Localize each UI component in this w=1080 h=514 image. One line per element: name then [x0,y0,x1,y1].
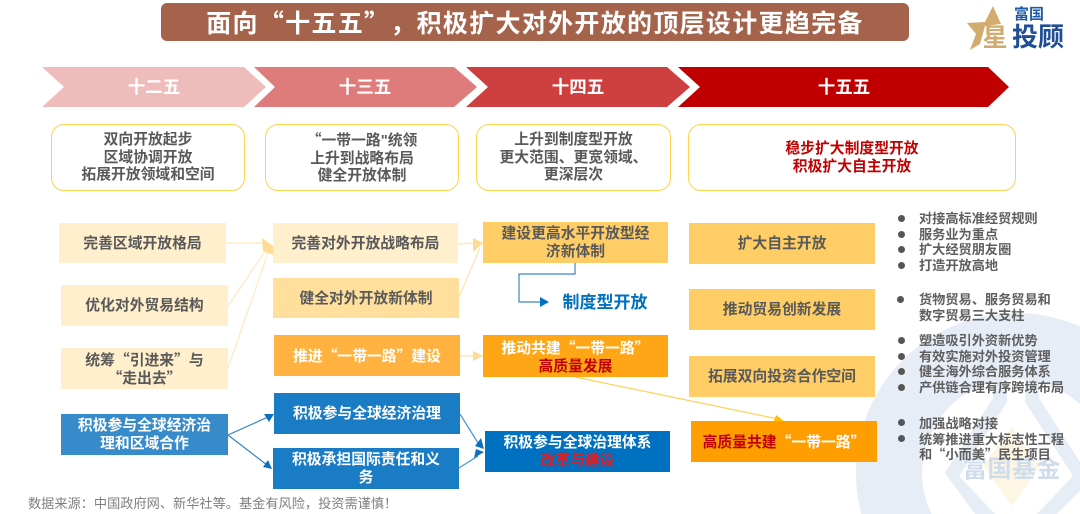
card: 十三五 summary: 上升到战略布局 [310,151,414,167]
box: 积极参与全球治理体系改革与建设 [485,431,670,472]
bullets: 扩大自主开放: 对接高标准经贸规则 [919,211,1038,226]
bullets: 推动贸易创新发展: 货物贸易、服务贸易和 [919,292,1051,307]
card: 十二五 summary: 拓展开放领域和空间 [81,167,215,183]
card: 十五五 summary [688,124,1016,191]
box: 建设更高水平开放型经济新体制: 济新体制 [546,244,605,260]
box: 拓展双向投资合作空间: 拓展双向投资合作空间 [708,369,856,385]
chevron: 十四五: 十四五 [552,77,604,97]
box: 积极参与全球经济治理: 积极参与全球经济治理 [293,406,441,422]
title banner: 面向“十五五”，积极扩大对外开放的顶层设计更趋完备 [206,4,864,40]
box: 统筹引进来与走出去: 统筹“引进来”与 [85,349,204,370]
arrows: pale links into 完善对外开放战略布局 [226,238,273,368]
card: 十四五 summary: 上升到制度型开放 [514,132,633,148]
box: 完善对外开放战略布局: 完善对外开放战略布局 [292,236,439,252]
box: 推动贸易创新发展 [689,289,875,330]
bullets: 高质量共建一带一路: 统筹推进重大标志性工程 [919,429,1064,448]
card: 十二五 summary [51,124,245,191]
box: 积极承担国际责任和义务: 积极承担国际责任和义 [292,452,440,468]
box: 优化对外贸易结构: 优化对外贸易结构 [85,298,204,314]
chevron: 十三五: 十三五 [339,77,391,97]
bullets: 高质量共建一带一路 [898,413,1064,463]
box: 健全对外开放新体制 [273,278,459,318]
box: 完善区域开放格局 [59,223,226,263]
footer: data source: 数据来源：中国政府网、新华社等。基金有风险，投资需谨慎！ [28,493,397,512]
box: 推动共建一带一路高质量发展: 推动共建“一带一路” [502,336,649,358]
chevron: 十二五 [42,67,266,107]
arrow: 推进一带一路 to 推动共建 [460,351,483,361]
bullets: 拓展双向投资合作空间: 有效实施对外投资管理 [919,349,1051,364]
card: 十二五 summary: 双向开放起步 [104,132,192,148]
box: 优化对外贸易结构 [61,285,228,326]
box: 统筹引进来与走出去: “走出去” [107,367,181,388]
card: 十四五 summary: 更大范围、更宽领域、 [500,150,647,166]
arrows: blue into 积极参与全球治理体系 [459,414,484,468]
box: 完善区域开放格局: 完善区域开放格局 [83,236,202,252]
box: 推动贸易创新发展: 推动贸易创新发展 [723,302,841,318]
box: 统筹引进来与走出去 [61,348,228,389]
box: 积极参与全球经济治理 [274,393,460,434]
box: 完善对外开放战略布局 [273,223,458,263]
arrow: bent connector to 制度型开放 [519,263,575,307]
bullets: 高质量共建一带一路: 和“小而美”民生项目 [919,444,1051,463]
logo: 富国星投顾: 星 [982,24,1008,52]
box: 建设更高水平开放型经济新体制: 建设更高水平开放型经 [502,226,649,242]
bullets: 拓展双向投资合作空间: 健全海外综合服务体系 [919,364,1051,379]
box: 推进一带一路建设 [274,335,460,376]
box: 积极参与全球治理体系改革与建设: 积极参与全球治理体系 [504,435,651,451]
box: 积极承担国际责任和义务: 务 [359,470,373,486]
box: 推动共建一带一路高质量发展: 高质量发展 [538,354,612,376]
box: 拓展双向投资合作空间 [689,356,875,397]
bullets: 扩大自主开放: 打造开放高地 [919,258,998,273]
box: 扩大自主开放: 扩大自主开放 [738,236,826,252]
bullets: 拓展双向投资合作空间 [898,333,1064,395]
box: 推动共建一带一路高质量发展 [483,335,668,377]
box: 扩大自主开放 [689,223,875,264]
logo: 富国星投顾: 投顾 [1012,22,1064,52]
chevron: 十五五: 十五五 [818,77,870,97]
card: 十三五 summary [265,124,459,191]
bullets: 扩大自主开放 [898,211,1038,273]
bullets: 高质量共建一带一路: 加强战略对接 [919,413,998,432]
card: 十四五 summary [476,124,671,191]
chevron: 十五五 [678,67,1009,107]
card: 十四五 summary: 更深层次 [544,167,603,183]
arrows: blue from 积极参与全球经济治理和区域合作 [228,414,274,469]
arrow: 推动共建 to 高质量共建 [575,377,784,421]
watermark: fund logo: 富国基金 [963,455,1061,483]
box: 健全对外开放新体制: 健全对外开放新体制 [299,290,433,306]
chevron: 十二五: 十二五 [128,77,180,97]
box: 高质量共建一带一路: 高质量共建“一带一路” [703,431,865,452]
card: 十三五 summary: “一带一路"统领 [307,129,417,150]
bullets: 拓展双向投资合作空间: 产供链合理有序跨境布局 [919,380,1064,395]
card: 十三五 summary: 健全开放体制 [318,168,406,184]
box: 建设更高水平开放型经济新体制 [483,222,668,263]
box: 积极参与全球经济治理和区域合作: 理和区域合作 [100,436,189,452]
label: 制度型开放: 制度型开放 [562,292,648,312]
box: 积极参与全球经济治理和区域合作: 积极参与全球经济治 [78,418,211,434]
arrows: pale links into 建设更高水平开放型经济新体制 [458,238,483,297]
bullets: 推动贸易创新发展 [897,292,1051,323]
box: 积极参与全球经济治理和区域合作 [61,414,228,455]
card: 十二五 summary: 区域协调开放 [104,150,192,166]
bullets: 推动贸易创新发展: 数字贸易三大支柱 [919,308,1024,323]
card: 十五五 summary: 积极扩大自主开放 [793,158,911,174]
box: 积极参与全球治理体系改革与建设: 改革与建设 [540,453,614,469]
logo: 富国星投顾: 富国 [1014,5,1044,23]
box: 高质量共建一带一路 [691,421,877,462]
bullets: 扩大自主开放: 扩大经贸朋友圈 [919,242,1011,257]
card: 十五五 summary: 稳步扩大制度型开放 [785,141,919,157]
box: 积极承担国际责任和义务 [273,448,459,489]
chevron: 十四五 [466,67,690,107]
bullets: 扩大自主开放: 服务业为重点 [919,227,998,242]
bullets: 拓展双向投资合作空间: 塑造吸引外资新优势 [919,333,1038,348]
chevron: 十三五 [254,67,477,107]
box: 推进一带一路建设: 推进“一带一路”建设 [293,345,441,366]
